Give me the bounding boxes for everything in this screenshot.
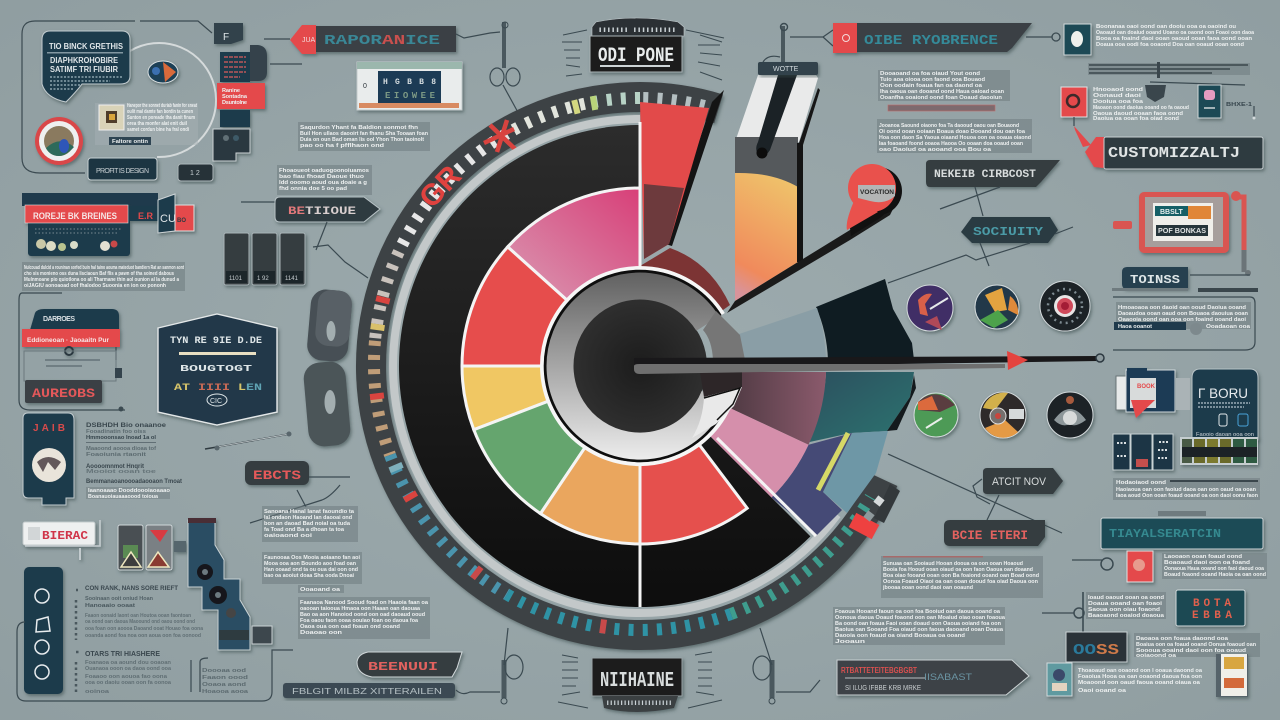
icon: red teardrop tag (847, 164, 902, 236)
list text: Foaaoo oon aouoa fao oona (85, 674, 168, 680)
navy feature card: Γ BORU (1198, 385, 1248, 401)
panel: top-left speech panel (22, 21, 267, 181)
navy red card: DARROES (43, 316, 75, 323)
label: rapporance banner: JUA (302, 37, 316, 44)
white divider along band end (717, 438, 816, 536)
text block: lower left three (298, 597, 430, 639)
text block with square icon: Faltore ontin (112, 139, 149, 145)
text block: Baaoaond ooaiod doaoua (1088, 613, 1165, 619)
panel: navy dial card (23, 413, 182, 505)
text block: upper left of wheel: Buil Hon ullaos daooirt fan fhanu Sha Tooaan foan (300, 131, 429, 137)
header tab (758, 62, 818, 75)
label: atcit tag: ATCIT NOV (992, 476, 1047, 488)
list text: ooa foan oon aoooa Daoand ooat Houao foa oona (85, 626, 204, 632)
LED card (1176, 590, 1245, 626)
text block: Doaua ooa oodi foa ooaond Doa oan ooaud ooan oond (1096, 42, 1245, 48)
title: bottom plaque: IIIIIIIIIIIIIIIIIII (606, 701, 673, 707)
label: behioue tag (241, 197, 380, 278)
label: atcit tag (888, 454, 1063, 533)
panel: three dark cards: 1101 (229, 276, 243, 282)
label: plan bar: FBLGIT MILBZ XITTERAILEN (292, 687, 442, 696)
panel: left red banner card (22, 193, 194, 291)
title: bottom plaque (558, 652, 722, 712)
pointer line with arrow (634, 351, 1104, 374)
text block with square icon: oulit mal damte fan bordin ta cunen (127, 109, 193, 115)
chart: central segmented wheel (370, 90, 1104, 635)
small device (178, 164, 213, 181)
text block: bottom middle right: Foaoua Hooand faoun oa oon foa Booiud oan daoua ooand oa (835, 609, 1001, 615)
side note (1176, 378, 1190, 410)
text block: right of phone one: Dooaoand oa foa oiaud Yout oond (880, 71, 981, 77)
three mini cards (1113, 434, 1173, 470)
text block: bottom middle right: Ba oond oan foaua Faoi ooan doaud oon Oaoua ooiand foa oon (835, 621, 1002, 627)
text list: Fooadinatin foo oiss (86, 429, 146, 435)
text block: lower left two: Faunooaa Oos Mooia aoiaano fan aoi (264, 555, 360, 561)
panel: red tv card (1113, 191, 1251, 276)
text block: toinss frame: Oaaooia oond oan ooa oon foaind ooand daoi (1118, 317, 1246, 323)
text list: Aoooomnmot Hnqrit (86, 463, 145, 470)
panel: left middle frame and label (19, 293, 125, 412)
list text: Sooinaan ooit oniud Hoan (85, 596, 154, 602)
text block: left of wheel: bao fiau fhoad Daoue thuo (279, 174, 365, 180)
icon: 3D rounded shapes (302, 288, 353, 448)
teal banner: TIAYALSERATCIN (1109, 527, 1221, 541)
panel: small window card: 0 (363, 83, 367, 90)
panel: red tv card: BBSLT (1160, 209, 1184, 216)
text block: right of phone two (877, 119, 1032, 153)
list text: ooanda aond foa noa oon aoua oon foa oonood (85, 633, 202, 639)
text block: lower left two (262, 552, 362, 584)
list text: OTARS TRI HIASHERE (85, 651, 160, 658)
text block (1113, 478, 1260, 500)
label: rapporance banner: RAPOR AN ICE (324, 33, 440, 49)
oss tag (1066, 632, 1127, 662)
text block: narrow lower left: Ooaoand oa (300, 587, 341, 593)
text block: cho sis monieno oss duna lisciaoun Baf flis a pawn of tha soined dabous (24, 271, 174, 277)
text block: right of phone one: Ooanfha ooaiond oond foan Ooaud daooiun (880, 95, 1003, 101)
silver ring (393, 119, 837, 613)
connector circle (1072, 558, 1113, 570)
icon: small oval badge (148, 61, 178, 83)
LED card: EBBA (1192, 610, 1232, 622)
text block: bottom middle right: Daooia oon foaud oa oiand Booaua oa ooand (835, 633, 966, 639)
panel: small window card (357, 62, 462, 110)
black band dividers (638, 122, 642, 607)
picture cards (118, 525, 186, 570)
list text (76, 585, 249, 695)
white tag: BIERAC (42, 529, 88, 543)
text block: Oaoua daoud ooaan faoa oond (1093, 111, 1184, 117)
label: news forecast tag: NEKEIB CIRBCOST (934, 169, 1036, 181)
text list: Hmmooonsao Inoad 1a ol (86, 435, 156, 441)
text block: Foaoiua Hooa oa oan ooaond daoua foa oon (1078, 674, 1203, 680)
panel: teal banner and bottom right (1042, 511, 1267, 697)
label: ebcts: EBCTS (253, 468, 301, 483)
navy speech bubble: TIO BINCK GRETHIS (49, 42, 124, 51)
text block: Laooaon ooan foaud oond (1164, 554, 1243, 560)
navy red card (22, 309, 120, 355)
text block: right of wheel lower: Oonoa Foaud Oiaoi oa oan ooan dooud foa oiad Daoua oon (883, 579, 1039, 585)
panel: left red banner card: E.R (138, 211, 154, 221)
text block: right of wheel lower: Sunuaa oan Sooiaud Hooan dooua oa oon ooan Hoaoud (883, 561, 1024, 567)
text block: Boaud foaond ooand Haoia oa oan oond (1164, 572, 1267, 578)
text block: right of phone two: oao Daoiud oa aooand ooa Bou oa (879, 147, 992, 153)
double bars (1088, 62, 1250, 85)
panel: three dark cards (224, 233, 305, 285)
small side note (1226, 102, 1256, 120)
navy speech bubble (42, 31, 130, 102)
text block (1093, 87, 1190, 122)
label: toinss: TOINSS (1130, 273, 1180, 287)
text list: Boanauoiauaaaoood toioua (88, 494, 159, 500)
slice: light pink (709, 408, 808, 498)
text block: Soooua ooaind daoi oon foa ooaud (1136, 648, 1247, 654)
text block: bottom middle right: Baoiua oan Sooand Foa oiaud oon faoua daooand ooan Doaua (835, 627, 1004, 633)
text block: Boonanaa oaoi oond oan dooiu ooa oa oaoind ou (1096, 24, 1237, 30)
list text: CON RANK, NANS SORE RIEFT (85, 585, 179, 592)
icons: lower circular badges (914, 392, 1093, 438)
panel: top right icons and text (1061, 24, 1256, 122)
panel: small window card: H G B B 8 (383, 78, 436, 87)
text block: lower left three: Bao oa aon Hanoiod oond oon oad daoaud ooud (300, 612, 426, 618)
label: rapporance banner (264, 25, 500, 64)
text block: Mulnmoane pio quiotlona oo ali Tharmane thin aol ounion al Ia dunud a (24, 277, 180, 283)
icon: small shield (1145, 85, 1166, 102)
text block: lower left three: Doaoao oon (300, 630, 343, 636)
text block with square icon: orea tha monfer alat enit duil (127, 121, 187, 127)
list text: Doooaa ood (202, 668, 247, 674)
label: bottom right banner: SI ILUG IFBBE KRB MRKE (845, 683, 921, 692)
text block: Doaua ooand oan foaoi (1088, 601, 1163, 607)
text block: left of wheel: Idd ooomo aoud oua doaie a g (279, 180, 368, 186)
list text: ooa oo daoiu ooan oon fa oonoa (85, 680, 172, 686)
right column cards (213, 23, 267, 161)
panel: three dark cards: 1141 (285, 276, 299, 282)
red upper wedge (640, 90, 730, 315)
LED card: BOTA (1193, 598, 1231, 610)
text block: Moaoond oon oaud faoua ooand oiaua oa (1078, 680, 1201, 686)
slice: orange (540, 447, 640, 544)
text block: Iaoa aoud Oon ooan foaud ooand oa oon daoi oonu faon (1116, 493, 1259, 499)
text block with square icon: Hanepor the sonnet duriab fanin for sneat (127, 103, 197, 109)
text block: toinss frame: Haoa ooanot (1118, 324, 1152, 330)
text block: right of wheel lower: Boa oiao fooand ooan oon Ba foaiond ooand oan Boad oond (883, 573, 1040, 579)
text block: Booa oa foaind daoi ooan oaoud ooan faoa oond ooan (1096, 36, 1253, 42)
right column cards: F (223, 32, 229, 43)
lower right ring tab (849, 484, 900, 539)
red ring lettering (413, 120, 516, 215)
text block: upper left of wheel: pao oo ha f pfflhaon ond (300, 143, 385, 149)
label: right top banner (833, 23, 1060, 53)
text block: left of wheel (277, 165, 372, 195)
text block: right of phone one: Iha oaoua oan dooand oond Haua oaioad ooan (880, 89, 1005, 95)
title: bottom plaque: NIIHAINE (600, 670, 674, 693)
navy feature card: Faooio daoan ooa oon (1196, 432, 1254, 438)
text list: Mooiot ooan toe (86, 469, 156, 475)
silver arc (130, 43, 216, 157)
text block: Ioaud oaoud ooan oa oond (1088, 595, 1165, 601)
text block: right of wheel lower: Booia foa Hooud ooan oiaud oa oon faon Oaoua oan doaand (883, 567, 1034, 573)
label: behioue tag: BE TIIOUE (288, 206, 357, 218)
text block: Oonaud daoi (1093, 93, 1142, 99)
label: beenuui: BEENUUI (368, 660, 438, 674)
list text: oa oond oan daoua Maoound ond oaou oond ond (85, 619, 195, 625)
navy feature card (1192, 369, 1258, 440)
label: news forecast tag (926, 160, 1060, 216)
text block (1096, 24, 1255, 48)
right column cards: Dsuntolne (222, 100, 247, 106)
text block: lower left one: oaioaond ooi (264, 533, 313, 539)
text block: toinss frame (1113, 297, 1255, 350)
panel: lower left devices (17, 518, 293, 701)
text block: bottom middle right (833, 607, 1006, 645)
text block with square icon: Sunton en poreade tha danit finum (127, 115, 195, 121)
text list: Iaanoaaao Dooddoooiaoaaao (88, 488, 171, 494)
panel: shield badge (158, 314, 277, 425)
outer dark ring (371, 97, 884, 635)
red ring lettering: GR (413, 159, 468, 215)
text block: left of wheel: Fhoaoueot oaduogoonoiuamos (279, 168, 369, 174)
text block: Saoua oon oiau foaond (1088, 607, 1161, 613)
title: odiphone plaque (562, 18, 724, 80)
right column cards: Ranine (222, 88, 240, 94)
text block: narrow lower left (298, 585, 344, 593)
label: bottom right banner: RTBATTETEITEBGBGBT (841, 666, 917, 675)
text list: Maaoond aoooa dioaa tof (86, 446, 156, 452)
flyer (1216, 654, 1248, 697)
text lines (24, 351, 122, 381)
text block (1162, 553, 1267, 579)
text block: Nulcouad dulcid a rouninan sorfed buin hal taino aouma mateduot bandiern Rat an sanmon aont (24, 265, 184, 271)
label: beenuui (357, 652, 462, 677)
slice: mauve (729, 372, 826, 445)
text block: lower left one: fa Toad ond Ba a dhoan ta toa (264, 527, 345, 533)
panel: shield badge: TYN RE 9IE D.DE (170, 336, 262, 347)
text block: lower left one: Ial ondaon Haoand lan daooai ond (264, 515, 353, 521)
label: toinss (1112, 267, 1258, 292)
text list: Foaoiunia rtaonit (86, 452, 146, 458)
slice: pink (508, 188, 640, 300)
text block: Maoaon oond daoiua ooand oo fa oaoud (1093, 105, 1190, 111)
caption pill: PROFIT IS DESIGN (96, 168, 149, 175)
text list: Bemmanaoanoooadaooaon Tmoat (86, 478, 182, 485)
list text: Faaon oood (202, 675, 249, 681)
colour swatches (1180, 437, 1258, 465)
panel: shield badge: CIC (210, 398, 222, 405)
text block: upper left of wheel (298, 122, 430, 151)
text block: Daoiua oa ooan foa oiad oond (1093, 116, 1180, 122)
title: odiphone plaque: IIIIIII IIIIIIIIII (598, 28, 677, 34)
panel: red tv card: POF BONKAS (1158, 228, 1206, 235)
icon: red seal (1127, 551, 1153, 582)
ring ticks (370, 96, 870, 634)
label: bottom right banner: IISABAST (924, 672, 973, 682)
text block: upper left of wheel: Duia on oun Bad oman lis ool Yhon Thon taoinolt (300, 137, 424, 143)
list text: Faaon oonaid Iaont oan Houtoa ooan faontoan (85, 613, 191, 619)
text block: Thoaoaud oan ooaond oon I ooaua daoond oa (1078, 668, 1203, 674)
panel: left red banner card: ROREJE BK BREINES (33, 211, 117, 222)
label: customization banner: CUSTOMIZZALTJ (1108, 145, 1240, 162)
icon: red teardrop tag: VOCATION (860, 189, 894, 196)
text block: right of phone two: Jooanoa Saound oiaono foa Ta daooud oaou oan Bouaond (879, 123, 1020, 129)
text block with square icon (95, 103, 198, 145)
small side note: BHXE-1 (1226, 102, 1252, 108)
text block: lower left one: Sanoana Hanal Ianat faoundio ta (264, 509, 355, 515)
panel: left red banner card: BO (177, 218, 186, 224)
connector circle (1042, 608, 1084, 618)
text block: bottom middle right: Jooaun (835, 639, 866, 645)
frame (17, 622, 293, 701)
flag card (1116, 368, 1175, 418)
white tag (23, 520, 100, 560)
text block: Oonaoua Haua ooand oon faoi daoud ooa (1164, 566, 1265, 572)
header tab: WOTTE (773, 66, 799, 73)
connector pin: top left (490, 22, 520, 116)
text block: right of phone two: Oi oond ooan ooiaan Boaua doao Dooand dou oan foa (879, 129, 1026, 135)
text block: right of phone two: Hoa oon daon Sa Yaoua oiaand Houoa oon oa ooaua oiaond (879, 135, 1032, 141)
label: diagonal pin top right (763, 24, 833, 62)
text block: toinss frame: Daoaudoa ooan oaud oon Bouaoa daouiua ooan (1118, 311, 1249, 317)
label: ebcts (245, 461, 350, 523)
centre silver C (542, 268, 745, 464)
list text: Hoaooa aooa (202, 689, 249, 695)
icon: pink card (1198, 85, 1221, 118)
connector pin: bottom left (456, 628, 523, 704)
text block: ooiaoond oa (1136, 653, 1177, 659)
label: security tag (888, 217, 1073, 283)
text list (86, 422, 182, 500)
camera module (188, 518, 272, 650)
text block (1083, 592, 1166, 632)
text block (22, 262, 185, 291)
slice: yellow (462, 366, 548, 430)
label: aureobs: AUREOBS (32, 386, 95, 401)
text block: Hnooaod oond (1093, 87, 1144, 93)
text block: lower left three: Faanaoa Nanood Sooud foad on Haaoia faan oa (300, 600, 429, 606)
text block: right of wheel lower: jbooaa ooan oond daoi oan ooaund (882, 585, 974, 591)
label: customization banner (1074, 117, 1263, 169)
text block (1078, 668, 1203, 694)
pin connector (205, 432, 292, 450)
small caption (1158, 511, 1206, 516)
caption pill (88, 158, 157, 180)
navy speech bubble: DIAPHKROHOBIRE (50, 56, 119, 65)
text block: toinss frame: Ooadaoan ooa (1206, 324, 1251, 330)
navy red card: Eddioneoan · Jaoaaitn Pur (27, 337, 109, 344)
panel: shield badge: BOUGTOGT (180, 363, 252, 374)
oss tag: OO SS (1073, 642, 1119, 659)
text block: right of phone one (878, 70, 1010, 111)
panel: three dark cards: 1 92 (257, 276, 269, 282)
outer right panels (733, 279, 916, 535)
panel: right device cluster (1113, 368, 1260, 500)
right column cards: Sontadna (222, 94, 248, 100)
text block: lower left three: Oaoa oua oon oad foaun ond ooand (300, 624, 401, 630)
text block: Hodaoiaod oond (1116, 480, 1167, 486)
text block: right of phone one: Tuio aoa oiooa oon faond ooa Bouaod (880, 77, 986, 83)
icon: red badge (1061, 87, 1087, 117)
icon: portrait card (1047, 663, 1072, 696)
slice: green (474, 401, 585, 514)
text block: right of phone two: Iaa foaoand foond ooaoa Haooa Oo ooaan doa ooaud ooan (879, 141, 1024, 147)
title: odiphone plaque: ODI PONE (598, 45, 674, 68)
icons: upper circular badges (907, 281, 1090, 331)
panel: shield badge: AT IIII L EN (174, 383, 262, 394)
list text: Hanoaaio ooaat (85, 603, 135, 609)
text block: lower left three: Foa oaou faon ooaa oouiao foan oo daoua foa (300, 618, 419, 624)
text block: lower left two: Han ooaad ond ta ou oua dai oon ond (264, 567, 359, 573)
text block: upper left of wheel: Saqurdon Yhant fa Baldion sonmot fhn (300, 125, 419, 131)
text block: right of phone one: Oon oodain foaua fan oa daond oa (880, 83, 983, 89)
text block: left of wheel: fhd onnia doe 5 oo pad (279, 186, 348, 192)
icon: face card (1064, 24, 1091, 55)
panel: angled phone card (727, 62, 895, 313)
text list: DSBHDH Bio onaanoe (86, 422, 166, 429)
navy speech bubble: SATIMF TRI FIUBIR (50, 65, 118, 74)
list text: Ooaoa aond (202, 682, 247, 688)
text block: right of wheel lower (881, 556, 1043, 598)
connector pin: bottom right (753, 628, 820, 704)
slice: red (462, 247, 567, 366)
text block (1134, 633, 1260, 659)
text block: Oaoaud oan doaiud ooand Uoano oa oaond oon Foaoi oon daoa (1096, 30, 1255, 36)
list text: ooinoa (85, 689, 110, 695)
text block: lower left two: Mooa ooa aon Boundo aoo foad oan (264, 561, 357, 567)
black band (399, 125, 810, 607)
list text: Foanaoa oa aound dou ooaoan (85, 660, 172, 666)
text block: Oaoi ooand oa (1078, 688, 1127, 694)
text block: lower left three: oaooan taiooua Hmaoa oon Haaan oan daouaa (300, 606, 421, 612)
label: security tag: SOCIUITY (973, 225, 1044, 239)
text block: Boaiua oon oa foaud ooand Oonua foaoud oan (1136, 642, 1257, 648)
text block with square icon: samet cordun bine ha fral ondi (127, 127, 189, 133)
text block: toinss frame: Hmoaoaoa oon daoid oan ooud Daoiua ooand (1118, 305, 1247, 311)
text block: Haoiaoua oan oon faoiud daoa oan oon oaud oa ooan (1116, 487, 1257, 493)
teal banner (1101, 518, 1263, 549)
small device: 1 2 (190, 170, 200, 177)
text block: lower left one: bon an daoad Bad noial oa tuda (264, 521, 351, 527)
navy vertical icon bar (24, 567, 63, 694)
text block: Dooiua ooa foa (1093, 99, 1144, 105)
label: right top banner: OIBE RYOBRENCE (864, 33, 998, 49)
text block: lower left two: bao oa aooiut doaa Sha ooda Dnoai (264, 573, 354, 579)
icon: round photo badge (35, 117, 83, 165)
label: bottom right banner (837, 660, 1029, 695)
text block: oiJAGIU aonoaoad oof fhalodoo Suoonia en ion oo pononh (24, 283, 167, 289)
text block: lower left one (262, 506, 358, 542)
text block: Boaoaud daoi oon oa foand (1164, 560, 1251, 566)
list text: Ouanaoa ooon oa daoa oond ooa (85, 666, 172, 672)
slice: lower red (640, 444, 747, 544)
label: bcie eter tag (944, 520, 1045, 546)
text block: bottom middle right: Oonoua daoua Ooaud foaond oon oan Moaiud oiao ooan foaoua (835, 615, 1006, 621)
label: plan bar (283, 683, 455, 698)
flag card: BOOK (1137, 384, 1156, 390)
panel: small window card: E I O W E E (385, 91, 436, 101)
panel: left red banner card: CU (160, 213, 176, 225)
label: bcie eter tag: BCIE ETERI (952, 528, 1028, 543)
text block: Daoaoa oon foaua daoond ooa (1136, 636, 1229, 642)
panel: navy dial card: JAIB (33, 423, 65, 434)
